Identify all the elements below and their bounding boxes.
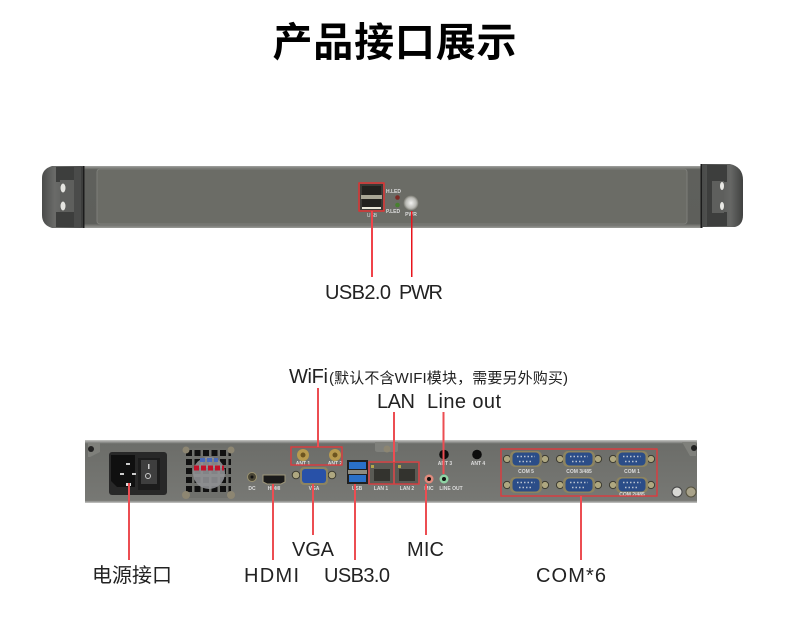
LAN ports: LAN 2 xyxy=(400,486,414,492)
Line out jack: LINE OUT xyxy=(439,486,463,492)
USB 2.0 ports: USB xyxy=(367,213,378,219)
arrow line: Line out xyxy=(442,412,444,474)
arrow line: LAN xyxy=(393,412,395,462)
rear plate xyxy=(85,440,697,503)
WiFi antennas: ANT 1 xyxy=(296,461,310,467)
COM ports: COM 1 xyxy=(624,469,640,475)
ANT 3 and ANT 4 holes: ANT 4 xyxy=(471,461,485,467)
COM ports: COM 5 xyxy=(518,469,534,475)
label: Line out: Line out xyxy=(427,391,501,413)
USB 2.0 ports xyxy=(359,183,384,219)
right handle xyxy=(702,164,743,227)
DC jack xyxy=(248,472,256,492)
LAN ports: LAN 1 xyxy=(374,486,388,492)
ground terminal xyxy=(672,487,696,497)
arrow line: MIC xyxy=(425,484,427,535)
Line out jack xyxy=(439,474,463,492)
LAN ports xyxy=(369,462,419,492)
front panel chassis xyxy=(42,164,743,228)
label: LAN: LAN xyxy=(377,391,415,413)
fan grille xyxy=(182,446,235,499)
label: WiFi: WiFi xyxy=(289,366,328,388)
COM ports: COM 2/485 xyxy=(619,492,645,498)
arrow line: PWR xyxy=(411,211,412,277)
label: COM*6: COM*6 xyxy=(536,565,606,587)
label: MIC: MIC xyxy=(407,539,444,561)
DC jack: DC xyxy=(248,486,256,492)
label: VGA: VGA xyxy=(292,539,335,561)
power inlet and switch xyxy=(109,452,167,495)
arrow line: power xyxy=(128,483,130,560)
label: power connector: 电源接口 xyxy=(92,564,172,587)
label: USB2.0 PWR: PWR xyxy=(399,282,443,304)
title: 产品接口展示 xyxy=(272,21,516,65)
label: USB3.0: USB3.0 xyxy=(324,565,390,587)
arrow line: COM xyxy=(580,496,582,560)
label: USB2.0 PWR xyxy=(325,282,443,304)
COM ports xyxy=(501,449,657,498)
HDMI port xyxy=(263,475,285,492)
MIC jack xyxy=(424,474,434,492)
label: USB2.0 PWR: USB2.0 xyxy=(325,282,391,304)
LED indicators xyxy=(386,189,401,215)
COM ports: COM 3/485 xyxy=(566,469,592,475)
WiFi antennas xyxy=(291,447,342,467)
VGA port xyxy=(292,467,336,492)
VGA port: VGA xyxy=(309,486,320,492)
front plate xyxy=(83,164,702,228)
left handle xyxy=(42,166,84,228)
LED indicators: H.LED xyxy=(386,189,401,195)
power button: PWR xyxy=(405,212,417,218)
ANT 3 and ANT 4 holes: ANT 3 xyxy=(438,461,452,467)
power button xyxy=(404,196,418,218)
USB 3.0 ports xyxy=(347,460,368,492)
label: WiFi xyxy=(289,366,568,388)
LED indicators: P.LED xyxy=(386,209,400,215)
arrow line: HDMI xyxy=(272,484,274,560)
USB 3.0 ports: USB xyxy=(352,486,363,492)
MIC jack: MIC xyxy=(424,486,434,492)
arrow line: USB2.0 xyxy=(371,211,373,277)
arrow line: USB3.0 xyxy=(354,484,356,560)
arrow line: WiFi xyxy=(317,388,319,447)
WiFi antennas: ANT 2 xyxy=(328,461,342,467)
HDMI port: HDMI xyxy=(268,486,281,492)
label: WiFi: (默认不含WIFI模块，需要另外购买) xyxy=(329,370,568,387)
arrow line: VGA xyxy=(312,484,314,535)
label: HDMI: HDMI xyxy=(244,565,299,587)
rear panel chassis xyxy=(85,440,697,503)
ANT 3 and ANT 4 holes xyxy=(438,450,485,467)
